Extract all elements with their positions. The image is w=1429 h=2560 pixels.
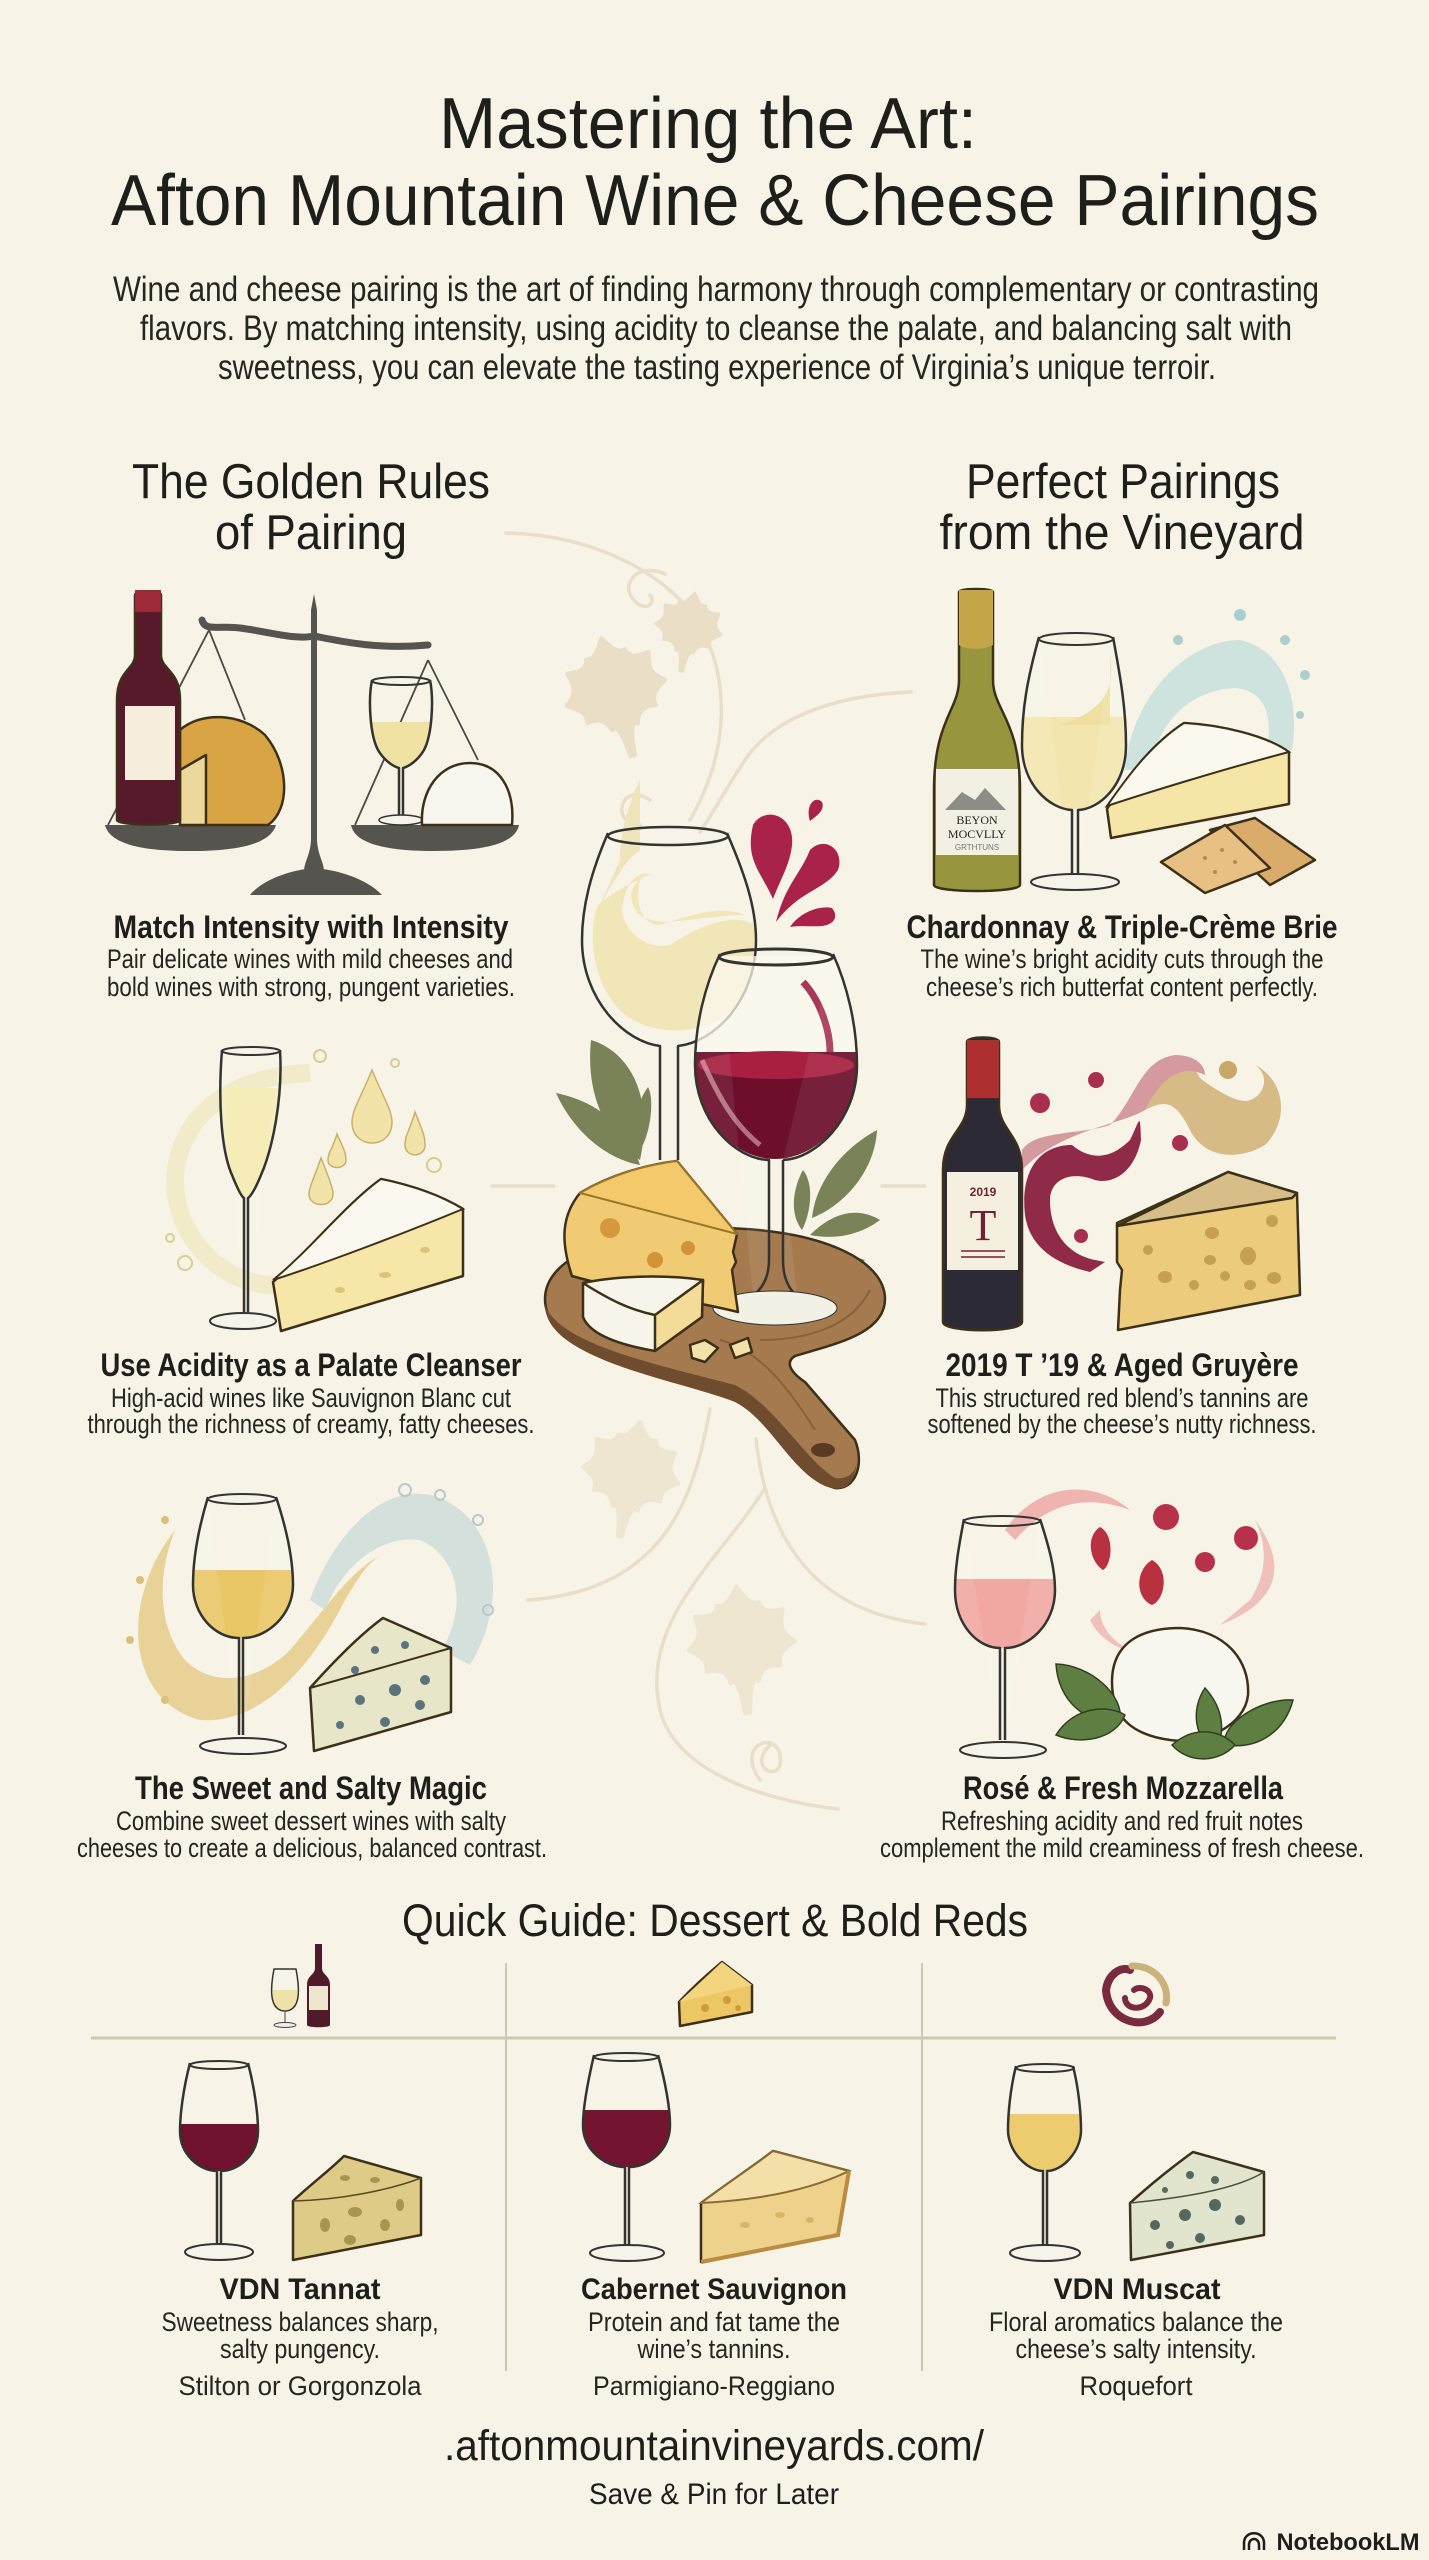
heading: golden rules: of Pairing xyxy=(215,506,407,560)
rule text: Pair delicate wines with mild cheeses and xyxy=(107,944,513,974)
column: VDN Tannat: Stilton or Gorgonzola xyxy=(178,2371,422,2401)
pairing 2: red blend and gruyere xyxy=(928,1038,1316,1439)
intro paragraph: sweetness, you can elevate the tasting experience of Virginia’s unique terroir. xyxy=(218,348,1216,387)
notebooklm badge: NotebookLM xyxy=(1276,2529,1420,2556)
pairing text xyxy=(928,1347,1316,1439)
wine glass on pan xyxy=(372,722,432,770)
pairing text xyxy=(880,1770,1364,1863)
column: Cabernet Sauvignon: Cabernet Sauvignon xyxy=(581,2273,847,2306)
icon: leaves behind xyxy=(556,1040,880,1277)
pairing text: This structured red blend’s tannins are xyxy=(936,1383,1308,1413)
pairing 3: rose and mozzarella xyxy=(880,1490,1364,1863)
title: Mastering the Art: xyxy=(439,84,977,164)
heading: perfect pairings xyxy=(940,455,1304,560)
central illustration: glasses on board xyxy=(545,780,885,1489)
column: VDN Muscat: Roquefort xyxy=(1080,2371,1193,2401)
pairing text: Rosé & Fresh Mozzarella xyxy=(963,1770,1283,1806)
mozzarella xyxy=(422,763,512,825)
white wine glass xyxy=(582,780,756,1160)
pairing text: cheese’s rich butterfat content perfectly. xyxy=(926,972,1318,1002)
pairing text: Refreshing acidity and red fruit notes xyxy=(941,1806,1303,1836)
rule 2: acidity xyxy=(88,1047,534,1439)
board xyxy=(545,1228,885,1488)
pairing 1: chardonnay and brie xyxy=(906,589,1338,1002)
column: VDN Tannat: salty pungency. xyxy=(220,2334,380,2364)
red wine glass xyxy=(694,949,858,1296)
rule text xyxy=(88,1347,534,1439)
column: Cabernet Sauvignon: Protein and fat tame the xyxy=(588,2307,840,2337)
column: VDN Muscat: Floral aromatics balance the xyxy=(989,2307,1283,2337)
heading: perfect pairings: Perfect Pairings xyxy=(966,455,1280,509)
pairing text: softened by the cheese’s nutty richness. xyxy=(928,1409,1316,1439)
heading: golden rules: The Golden Rules xyxy=(132,455,490,509)
save prompt: Save & Pin for Later xyxy=(589,2478,839,2511)
brie wedge xyxy=(583,1277,752,1362)
column: Cabernet Sauvignon: Parmigiano-Reggiano xyxy=(593,2371,835,2401)
yellow cheese wedge xyxy=(564,1161,738,1312)
website url: .aftonmountainvineyards.com/ xyxy=(444,2422,984,2470)
icon: cheese xyxy=(679,1962,752,2026)
icon: dark bottle, swirl and gruyere xyxy=(943,1038,1300,1330)
icon: chardonnay, splash, brie, crackers: MOCVLLY xyxy=(948,827,1006,841)
pairing text: The wine’s bright acidity cuts through the xyxy=(920,944,1324,974)
pairing text: Chardonnay & Triple-Crème Brie xyxy=(906,909,1338,945)
icon: dark bottle, swirl and gruyere: T xyxy=(970,1201,997,1250)
rule text: Combine sweet dessert wines with salty xyxy=(116,1806,506,1836)
wheel of cheese xyxy=(180,717,284,825)
icon: chardonnay, splash, brie, crackers xyxy=(934,589,1315,893)
glass base xyxy=(713,1291,837,1325)
rule 1: match intensity xyxy=(105,590,519,1002)
pairing text xyxy=(906,909,1338,1002)
icon: rose, berries, mozzarella, basil xyxy=(955,1490,1293,1759)
icon: flute, drops and brie wedge xyxy=(166,1047,463,1331)
rule text: The Sweet and Salty Magic xyxy=(135,1770,487,1806)
column: VDN Tannat: Sweetness balances sharp, xyxy=(162,2307,438,2337)
rule text: High-acid wines like Sauvignon Blanc cut xyxy=(111,1383,511,1413)
decorative vine top xyxy=(506,533,911,832)
rule text xyxy=(77,1770,547,1863)
quick guide table xyxy=(91,1944,1336,2401)
rule text: Match Intensity with Intensity xyxy=(114,909,509,945)
rule 3: sweet and salty xyxy=(77,1484,547,1863)
column: VDN Muscat: VDN Muscat xyxy=(1054,2273,1220,2306)
red splash drops xyxy=(751,800,839,927)
icon: dessert wine, swirls, blue cheese xyxy=(126,1484,493,1754)
column: VDN Tannat xyxy=(162,2061,438,2401)
column: Cabernet Sauvignon xyxy=(580,2053,849,2401)
rule text: through the richness of creamy, fatty cheeses. xyxy=(88,1409,534,1439)
icon: chardonnay, splash, brie, crackers: BEYON xyxy=(956,813,998,827)
column: VDN Tannat: VDN Tannat xyxy=(220,2273,380,2306)
decorative vine bottom xyxy=(492,1186,925,1809)
intro paragraph xyxy=(113,270,1319,387)
rule text: cheeses to create a delicious, balanced contrast. xyxy=(77,1833,547,1863)
bottle xyxy=(117,591,180,824)
title xyxy=(111,84,1319,241)
icon: dark bottle, swirl and gruyere: 2019 xyxy=(970,1185,997,1199)
icon: glass and bottle xyxy=(272,1944,330,2028)
title: Afton Mountain Wine & Cheese Pairings xyxy=(111,161,1319,241)
rule text: bold wines with strong, pungent varieties. xyxy=(107,972,515,1002)
icon: swirl xyxy=(1106,1966,1167,2022)
column: VDN Muscat xyxy=(989,2064,1283,2401)
rule text xyxy=(107,909,515,1002)
icon: chardonnay, splash, brie, crackers: GRTHTUNS xyxy=(955,843,999,852)
heading: perfect pairings: from the Vineyard xyxy=(940,506,1304,560)
icon: balance scale with wine and cheese xyxy=(105,590,519,895)
heading: quick guide: Quick Guide: Dessert & Bold Reds xyxy=(402,1895,1028,1946)
heading: golden rules xyxy=(132,455,490,560)
pairing text: 2019 T ’19 & Aged Gruyère xyxy=(946,1347,1298,1383)
column: Cabernet Sauvignon: wine’s tannins. xyxy=(637,2334,790,2364)
column: VDN Muscat: cheese’s salty intensity. xyxy=(1016,2334,1256,2364)
rule text: Use Acidity as a Palate Cleanser xyxy=(100,1347,522,1383)
